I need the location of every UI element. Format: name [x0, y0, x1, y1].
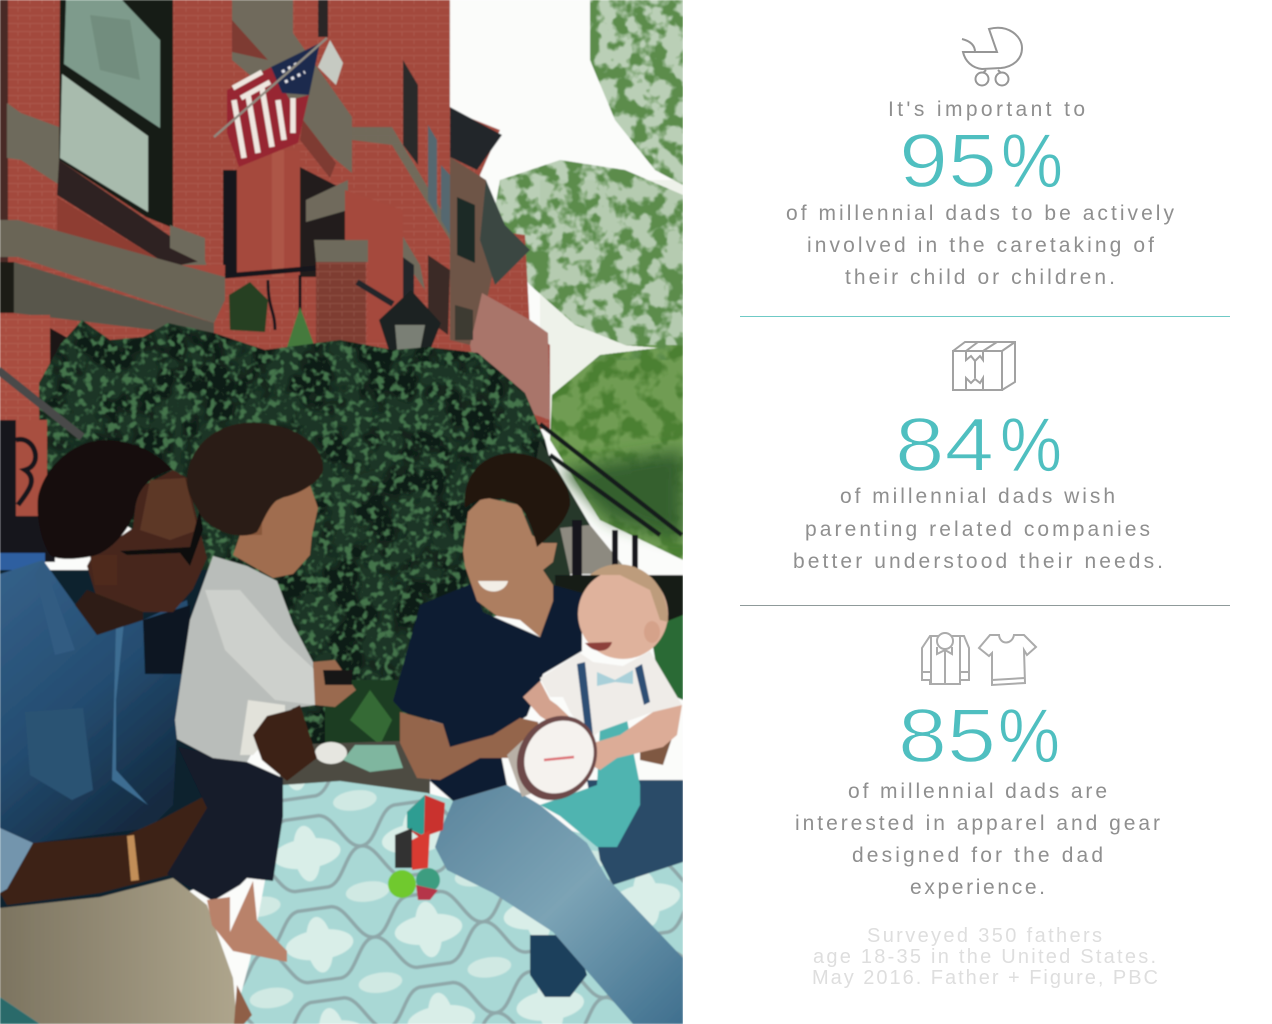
photo: two dads with their children on a stoop — [0, 0, 683, 1024]
text: second statistic description — [793, 485, 1163, 573]
stat: 84% — [895, 403, 1062, 488]
right man's hair — [465, 453, 570, 547]
tambourine — [501, 700, 613, 816]
stat: 84%: 84 — [895, 403, 994, 488]
stat: 85% — [898, 694, 1060, 779]
text: survey source note: age 18-35 in the United States. — [813, 946, 1156, 968]
stat: 84%: % — [1000, 403, 1062, 488]
text: survey source note: Surveyed 350 fathers — [867, 925, 1102, 947]
building: brick facade — [0, 0, 550, 530]
stair railing on the right — [510, 424, 683, 640]
brick pier left of the window — [0, 0, 8, 290]
text: second statistic description: parenting related companies — [805, 518, 1150, 541]
trees on the right — [490, 0, 683, 565]
stat: 95%: % — [1001, 119, 1063, 204]
window with blinds — [59, 0, 173, 228]
bush — [38, 320, 550, 746]
stone trim and windows on the right bay — [352, 127, 450, 240]
door columns and doorway — [237, 150, 300, 277]
icon: shirt and t-shirt — [922, 633, 1036, 685]
bowl and bag — [315, 742, 347, 764]
text: second statistic description: better understood their needs. — [793, 550, 1163, 573]
text: third statistic description: experience. — [910, 876, 1045, 899]
text: third statistic description: of millennial dads are — [848, 780, 1107, 803]
text: third statistic description: designed for the dad — [852, 844, 1103, 867]
stat: 85%: % — [998, 694, 1060, 779]
ground plants by the mat — [325, 680, 405, 745]
leaves right of baby — [650, 615, 683, 700]
man's hair — [38, 440, 173, 559]
text: third statistic description: interested in apparel and gear — [795, 812, 1160, 835]
sky — [0, 0, 683, 1024]
icon: cardboard box — [953, 342, 1015, 390]
text: first statistic description: involved in the caretaking of — [807, 234, 1154, 257]
left man — [0, 440, 270, 1024]
toy on the mat — [388, 795, 445, 900]
text: first statistic description — [786, 202, 1174, 289]
text: third statistic description — [795, 780, 1160, 899]
flag — [214, 38, 327, 167]
picnic mat — [233, 781, 683, 1024]
text: first statistic description: their child or children. — [845, 266, 1115, 289]
brick pillar — [314, 240, 368, 262]
wrought iron and brick at the left edge — [0, 370, 82, 573]
text: survey source note: May 2016. Father + Figure, PBC — [812, 967, 1158, 989]
baby — [523, 564, 682, 847]
neighbouring row houses — [450, 107, 502, 170]
lamp — [357, 282, 393, 304]
stone sills and bands — [7, 103, 209, 273]
stat: 95%: 95 — [899, 119, 997, 204]
toddler — [167, 423, 356, 962]
text: second statistic description: of millennial dads wish — [840, 485, 1115, 508]
right man — [393, 453, 683, 1024]
panel: statistics column — [740, 26, 1230, 989]
icon: baby stroller — [962, 28, 1022, 85]
text: first statistic description: of millennial dads to be actively — [786, 202, 1174, 225]
stone bay over the door — [232, 0, 352, 173]
balcony railing with planters — [225, 268, 316, 276]
text: survey source note — [812, 925, 1158, 989]
stat: 95% — [899, 119, 1063, 204]
stat: 85%: 85 — [898, 694, 996, 779]
text: it's important to: It's important to — [888, 98, 1085, 121]
